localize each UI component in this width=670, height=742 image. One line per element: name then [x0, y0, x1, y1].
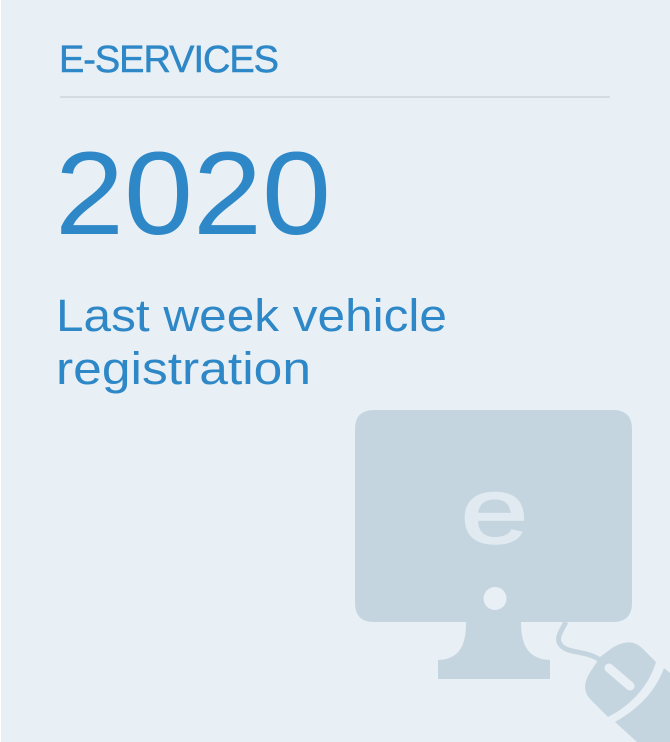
mouse button slot: [609, 668, 630, 686]
letter e: e: [460, 458, 528, 563]
description text: registration: [56, 343, 311, 394]
mouse body: [585, 642, 656, 717]
year: 2020: 2020: [55, 128, 331, 260]
mouse cable: [559, 622, 600, 660]
heading: E-SERVICES: E-SERVICES: [59, 39, 279, 81]
monitor screen and stand: [355, 410, 632, 679]
hand or sleeve shape: [615, 668, 670, 742]
description text: Last week vehicle: [56, 290, 447, 341]
monitor power button: [484, 587, 506, 610]
icon: computer monitor with mouse: [355, 410, 670, 742]
description text: [56, 290, 447, 394]
